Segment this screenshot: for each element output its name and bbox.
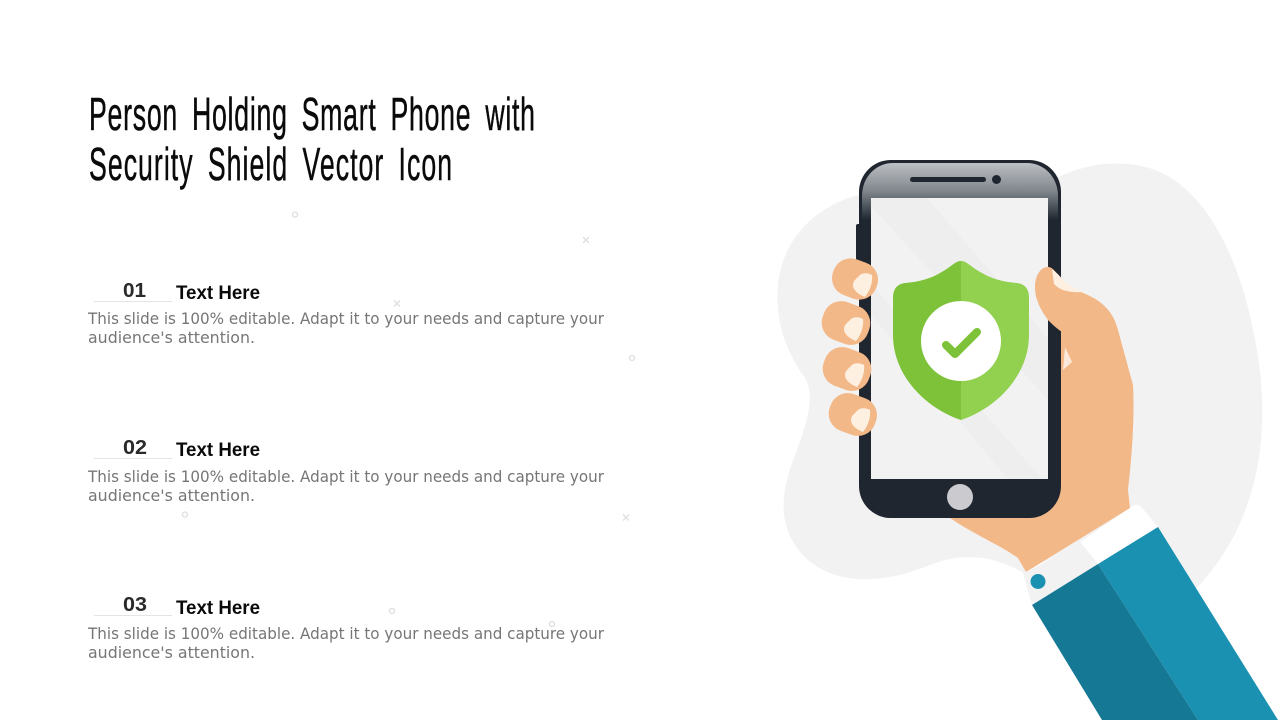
side button [856, 224, 861, 264]
decorative specks [182, 212, 634, 626]
illustration: hand holding phone [817, 160, 1278, 720]
finger 2 [817, 296, 875, 350]
item 01: audience's attention. [88, 328, 255, 347]
finger 3 [818, 342, 876, 396]
item 03: 03 [123, 594, 147, 616]
item 02: 02 [123, 437, 147, 459]
phone body [859, 160, 1061, 518]
shirt cuff [1022, 505, 1158, 605]
item 02: This slide is 100% editable. Adapt it to your needs and capture your [87, 467, 604, 486]
phone [859, 160, 1061, 518]
thumb [1035, 267, 1100, 380]
item 03: This slide is 100% editable. Adapt it to your needs and capture your [87, 624, 604, 643]
item 03 [87, 594, 604, 662]
item 01: 01 [123, 280, 146, 302]
item 02: Text Here [176, 440, 260, 461]
sleeve [1032, 527, 1278, 720]
item 01 [87, 280, 604, 347]
finger 4 [824, 388, 882, 441]
camera [992, 175, 1001, 184]
title: Security Shield Vector Icon [89, 138, 452, 190]
title [89, 88, 535, 190]
background blob [777, 163, 1262, 595]
screen [871, 198, 1048, 479]
hand palm and wrist [950, 285, 1134, 572]
item 03: audience's attention. [88, 643, 255, 662]
title: Person Holding Smart Phone with [89, 88, 535, 140]
item 01: Text Here [176, 283, 260, 304]
item 01: This slide is 100% editable. Adapt it to your needs and capture your [87, 309, 604, 328]
icon: security shield [893, 261, 1029, 420]
item 02 [87, 437, 604, 505]
item 02: audience's attention. [88, 486, 255, 505]
item 03: Text Here [176, 598, 260, 619]
home button [947, 484, 973, 510]
phone top bezel [862, 163, 1058, 220]
finger 1 [827, 253, 883, 305]
speaker [910, 177, 986, 182]
